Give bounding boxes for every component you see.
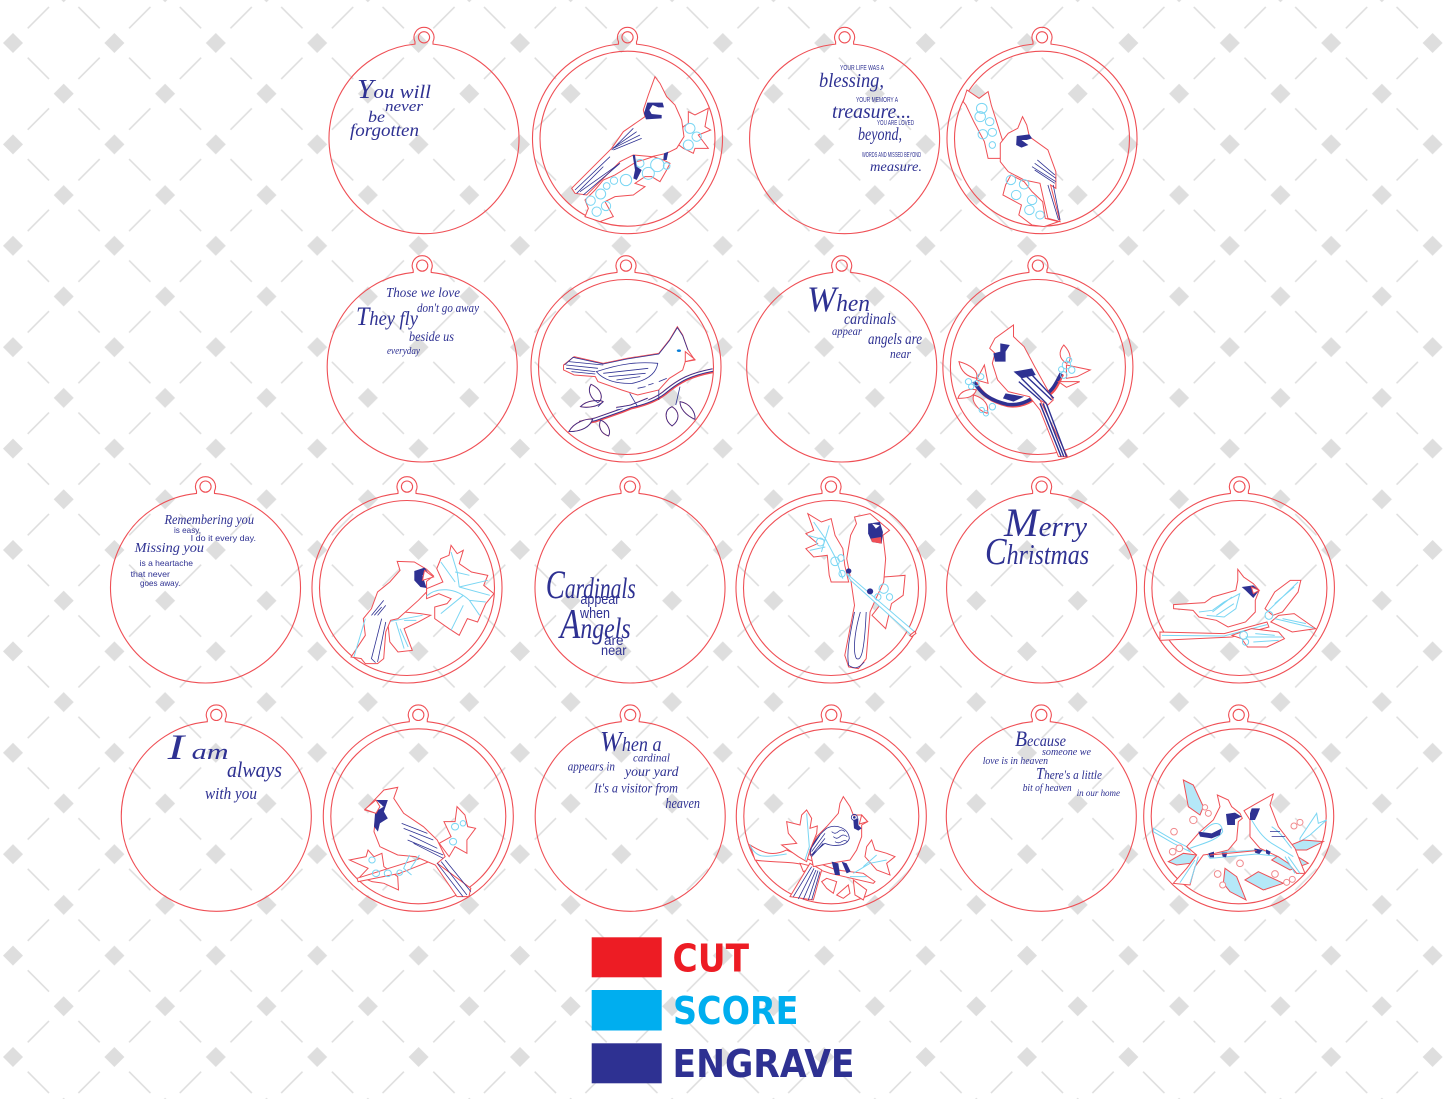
text: Cardinals appear when Angels are near: when — [579, 605, 610, 622]
ornament 2: cardinal with berries — [532, 27, 722, 234]
text: Cardinals appear when Angels are near: are — [604, 632, 624, 648]
ornament 8: cardinal with dark branch — [943, 256, 1133, 462]
ornament 4: cardinal facing left with blossom — [947, 27, 1137, 234]
legend item: cut: CUT — [672, 937, 749, 981]
text: When a cardinal verse — [568, 726, 700, 812]
text: When cardinals appear angels are near: near — [890, 346, 912, 361]
text: Those we love verse — [356, 286, 479, 357]
text: Remembering you verse: goes away. — [140, 578, 180, 588]
ornament 5: Those we love — [327, 256, 517, 462]
text: Your life was a blessing verse: YOU ARE LOVED — [877, 118, 914, 127]
ornament 6: cardinal on leafy branch — [531, 256, 721, 462]
text: Because someone we love verse: bit of heaven — [1023, 782, 1072, 794]
bird illustration — [750, 797, 895, 900]
text: Remembering you verse: I do it every day. — [191, 533, 256, 543]
text: Your life was a blessing verse: blessing, — [819, 70, 884, 92]
text: Your life was a blessing verse: WORDS AND MISSED BEYOND — [862, 152, 921, 159]
text: You will never be forgotten: be — [368, 109, 385, 126]
text: Because someone we love verse: love is in heaven — [983, 755, 1048, 767]
ornament 11: Cardinals appear when Angels are near — [535, 477, 725, 683]
text: Merry Christmas: Christmas — [985, 531, 1089, 573]
text: Cardinals appear when Angels are near: Cardinals — [546, 562, 636, 607]
text: Those we love verse: They fly — [356, 302, 418, 331]
ornament 1: You will never be forgotten — [329, 27, 519, 234]
text: When cardinals appear angels are near — [807, 279, 922, 361]
text: When cardinals appear angels are near: When — [807, 279, 870, 319]
text: I am always with you — [166, 727, 282, 803]
legend item: cut — [592, 937, 749, 981]
text: Cardinals appear when Angels are near — [546, 562, 636, 658]
legend item: score — [592, 989, 798, 1033]
legend item: engrave — [592, 1042, 854, 1086]
text: You will never be forgotten: You will — [357, 74, 431, 104]
text: When cardinals appear angels are near: cardinals — [844, 311, 896, 328]
bird illustration — [572, 77, 711, 222]
text: Your life was a blessing verse: YOUR LIFE WAS A — [840, 63, 884, 72]
text: I am always with you: always — [227, 757, 282, 782]
text: When a cardinal verse: appears in — [568, 759, 615, 774]
legend — [592, 937, 854, 1086]
text: Cardinals appear when Angels are near: appear — [580, 591, 619, 608]
text: Remembering you verse — [131, 513, 256, 588]
ornament 14: cardinal on pine branch — [1144, 477, 1334, 683]
text: Your life was a blessing verse: measure. — [870, 160, 922, 175]
text: Because someone we love verse: Because — [1015, 726, 1066, 751]
bird illustration — [351, 545, 494, 664]
ornament 13: Merry Christmas — [947, 477, 1137, 683]
bird illustration — [1160, 569, 1316, 647]
text: You will never be forgotten: never — [385, 99, 423, 115]
ornament 18: cardinal on leafy branch, tail down — [736, 705, 926, 911]
bird illustration — [958, 325, 1090, 457]
ornament 17: When a cardinal appears in your yard — [535, 705, 725, 911]
ornament 9: Remembering you — [110, 477, 300, 683]
text: I am always with you: I am — [166, 727, 229, 767]
bird illustration — [349, 787, 476, 897]
text: You will never be forgotten: forgotten — [350, 120, 419, 140]
text: Your life was a blessing verse: YOUR MEMORY A — [856, 95, 898, 104]
text: When cardinals appear angels are near: angels are — [868, 331, 922, 348]
text: Remembering you verse: Missing you — [134, 541, 204, 556]
text: I am always with you: with you — [205, 784, 257, 803]
text: Remembering you verse: that never — [131, 569, 170, 579]
text: Those we love verse: don't go away — [417, 300, 479, 315]
text: Cardinals appear when Angels are near: near — [601, 642, 627, 658]
legend item: engrave: ENGRAVE — [672, 1042, 854, 1086]
text: Because someone we love verse: There's a little — [1036, 764, 1102, 783]
text: When a cardinal verse: When a — [600, 726, 662, 758]
text: Merry Christmas: Merry — [1003, 500, 1088, 545]
ornament 16: cardinal with long tail — [323, 705, 513, 911]
ornament 10: cardinal with maple leaves — [312, 477, 502, 683]
text: When a cardinal verse: It's a visitor from — [593, 782, 678, 797]
text: When a cardinal verse: heaven — [665, 796, 700, 812]
text: Remembering you verse: is a heartache — [140, 558, 193, 568]
text: Those we love verse: beside us — [409, 330, 454, 345]
legend item: score: SCORE — [673, 989, 798, 1033]
text: When a cardinal verse: cardinal — [633, 751, 671, 765]
text: Because someone we love verse: in our home — [1077, 789, 1120, 799]
text: You will never be forgotten — [350, 74, 431, 140]
text: Your life was a blessing verse — [819, 63, 922, 175]
ornament 7: When cardinals appear — [747, 256, 937, 462]
ornament 3: Your life was a blessing — [750, 27, 940, 234]
text: Those we love verse: everyday — [387, 345, 420, 357]
text: Merry Christmas — [985, 500, 1089, 573]
ornament 19: Because someone we love is in heaven — [946, 705, 1136, 911]
text: Because someone we love verse — [983, 726, 1120, 799]
text: When cardinals appear angels are near: appear — [832, 324, 862, 338]
text: Those we love verse: Those we love — [386, 286, 460, 301]
bird illustration — [963, 90, 1060, 227]
bird illustration — [564, 327, 713, 436]
text: Your life was a blessing verse: beyond, — [858, 124, 902, 144]
ornament 20: pair of cardinals — [1144, 705, 1334, 911]
bird illustration — [806, 514, 916, 669]
ornament 15: I am always with you — [121, 705, 311, 911]
ornament 12: cardinal on diagonal branch — [736, 477, 926, 683]
text: Cardinals appear when Angels are near: Angels — [558, 602, 631, 648]
text: Remembering you verse: is easy, — [174, 525, 201, 535]
text: Remembering you verse: Remembering you — [164, 513, 254, 528]
text: When a cardinal verse: your yard — [623, 765, 679, 780]
text: Your life was a blessing verse: treasure... — [832, 101, 911, 123]
bird illustration — [1153, 780, 1327, 900]
text: Because someone we love verse: someone we — [1042, 746, 1091, 758]
